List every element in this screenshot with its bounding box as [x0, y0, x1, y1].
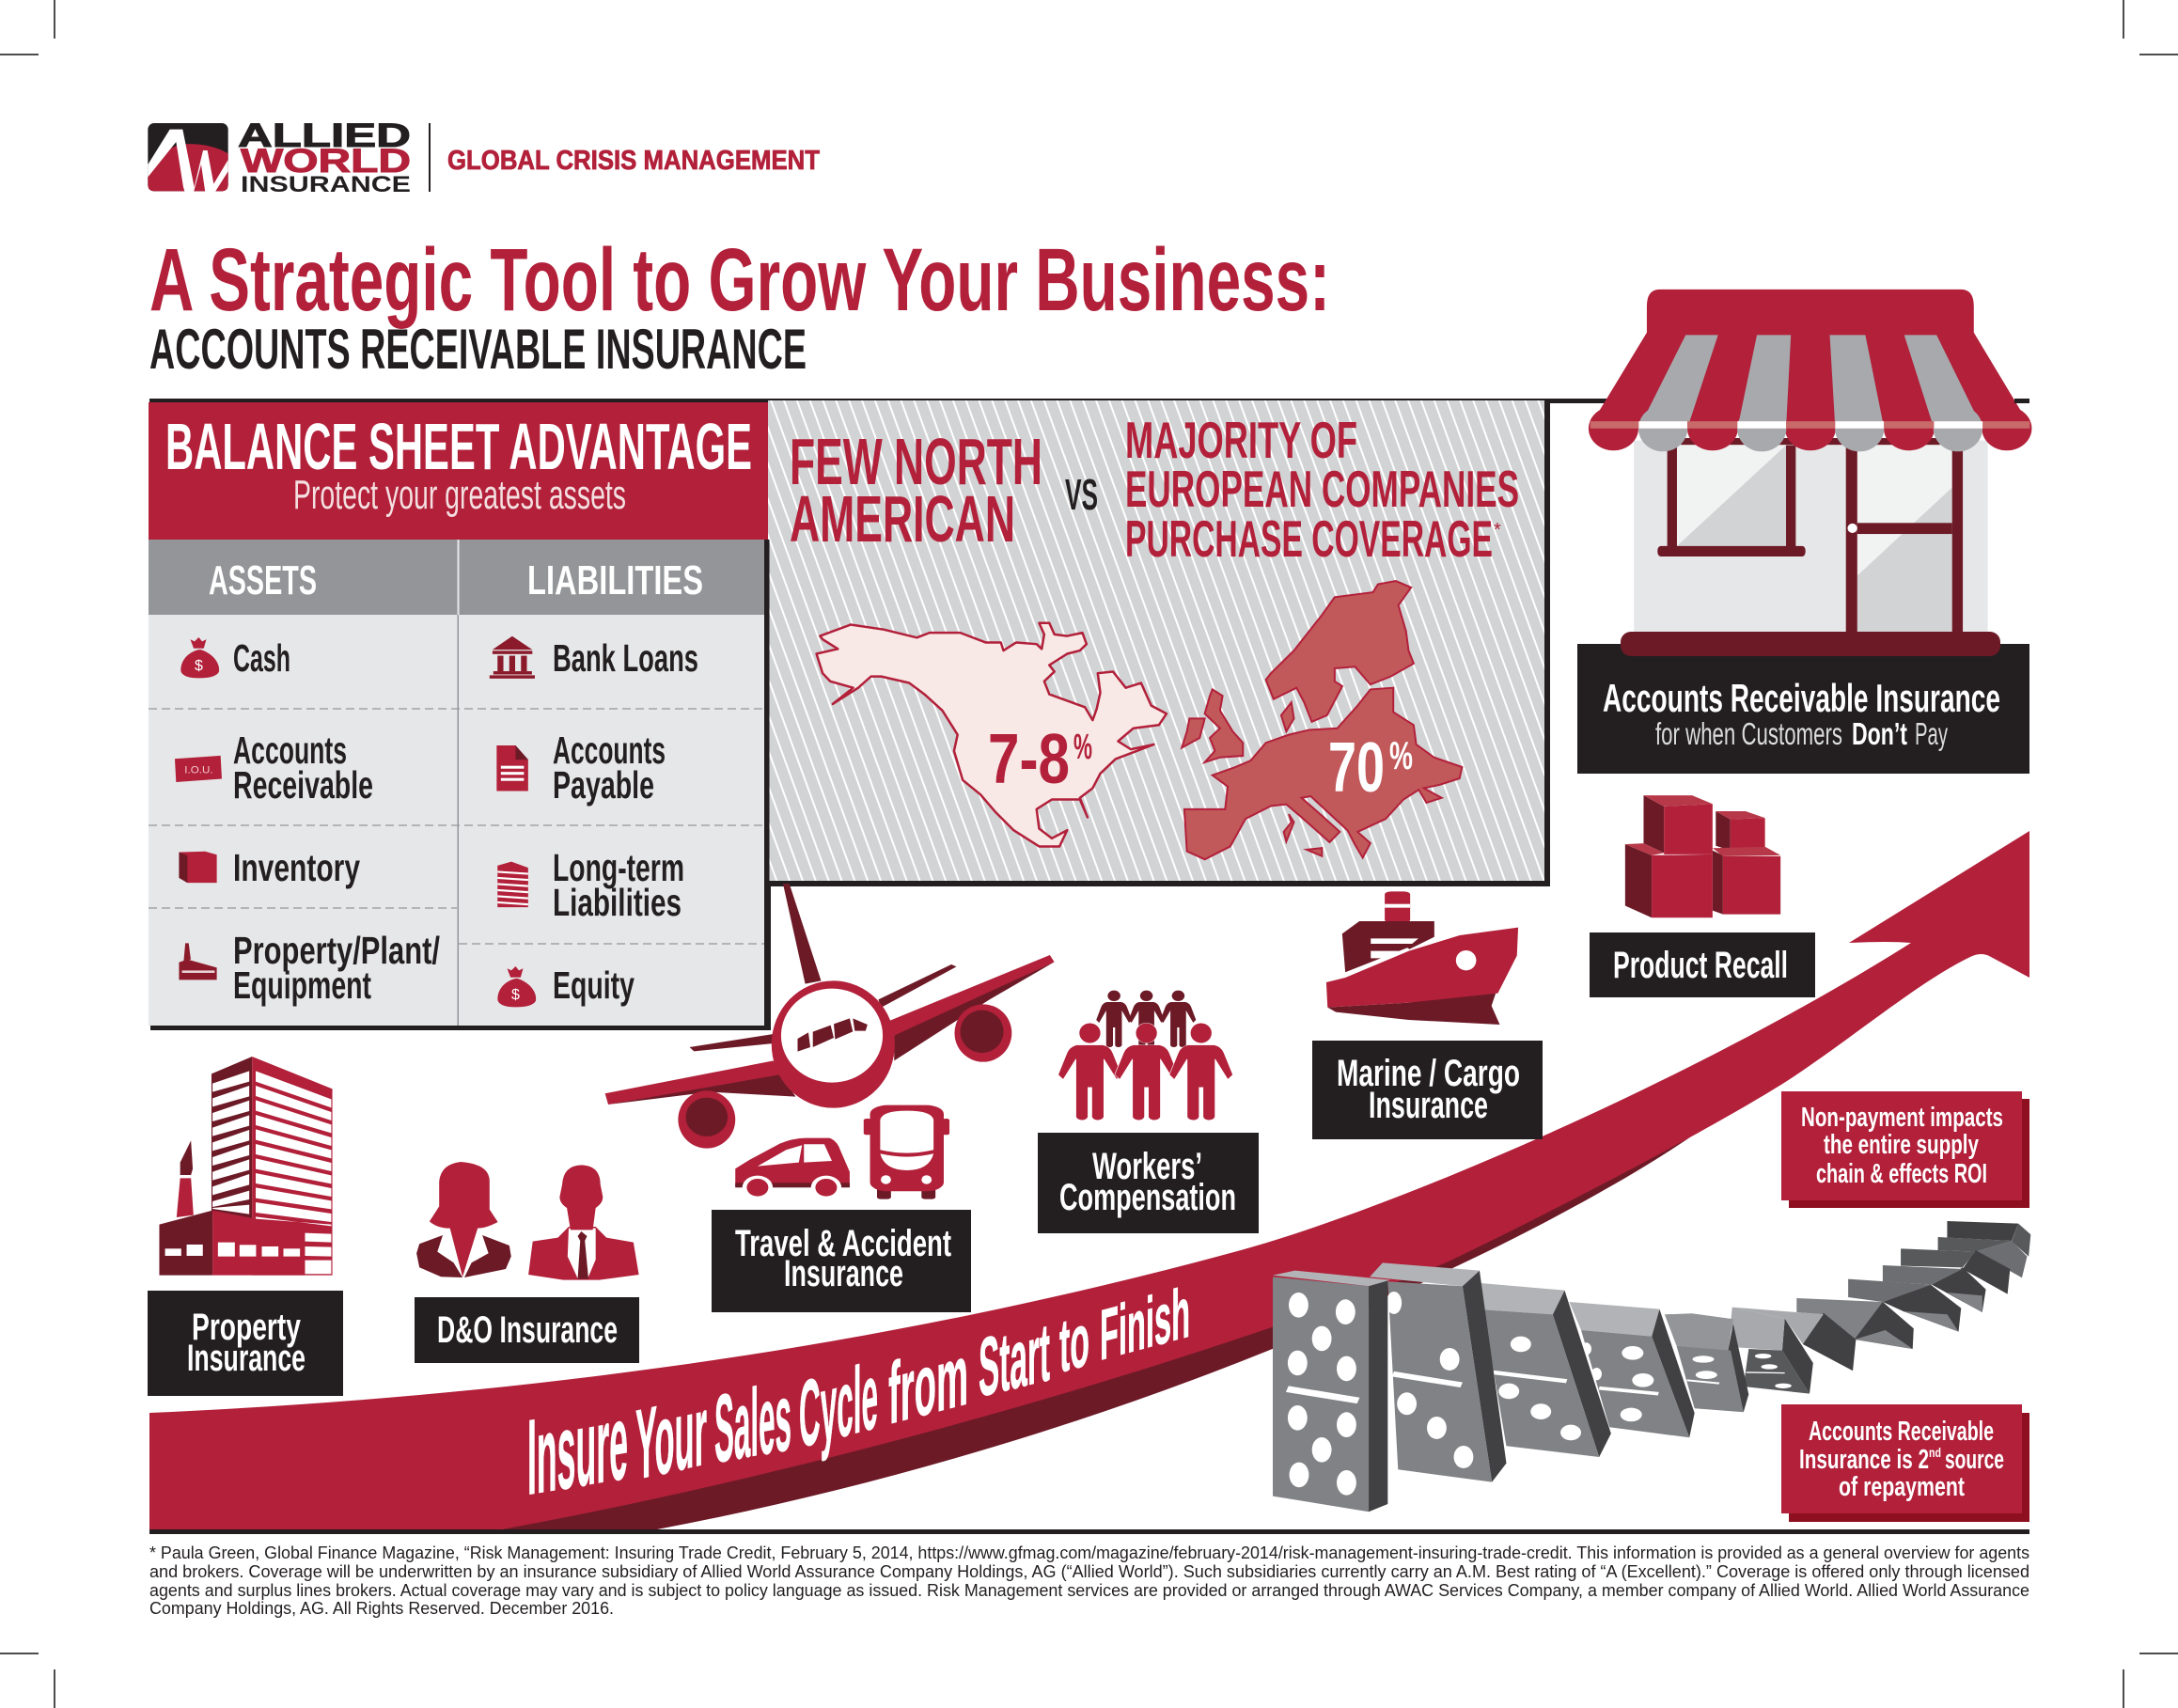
label: workers compensation: Workers’: [1092, 1146, 1202, 1187]
footnote: * Paula Green, Global Finance Magazine, “Risk Management: Insuring Trade Credit, February 5, 2014, https://www.gfmag.com/magazine/february-2014/risk-management-insuring-trade-credit. This information is provided as a general overview for agents: [149, 1543, 2029, 1562]
heading: few North American: [790, 425, 1042, 556]
callout: second source of repayment: of repayment: [1839, 1472, 1965, 1502]
row: cash: [180, 636, 290, 680]
row: equity: Equity: [553, 964, 635, 1007]
assets column: [175, 636, 440, 1007]
heading: majority of European companies: MAJORITY OF: [1125, 411, 1357, 469]
row: accounts receivable: [175, 729, 373, 807]
table header: LIABILITIES: [527, 557, 703, 603]
label: workers compensation: Compensation: [1059, 1177, 1236, 1218]
logo: Allied World Insurance: INSURANCE: [241, 172, 411, 197]
row: accounts payable: [496, 729, 666, 807]
front row of workers: [1058, 1023, 1233, 1120]
icon: property buildings: [159, 1057, 333, 1276]
label: marine and cargo insurance: Marine / Cargo: [1337, 1053, 1520, 1094]
icon: airplane: [605, 884, 1055, 1149]
table header: ASSETS: [209, 557, 317, 603]
label: property insurance: [148, 1291, 343, 1396]
heading: majority of European companies: [1125, 411, 1519, 568]
ribbon text: insure your sales cycle from start to finish: Start: [979, 1305, 1050, 1415]
row: equity: $: [511, 987, 520, 1003]
row: property plant equipment: Equipment: [233, 964, 371, 1007]
map: Europe: [1182, 581, 1462, 859]
map: Europe: 70: [1328, 728, 1385, 807]
text: Global Crisis Management: GLOBAL CRISIS MANAGEMENT: [447, 146, 820, 176]
callout: non-payment impacts: [1781, 1091, 2029, 1208]
icon: directors and officers: [416, 1162, 639, 1280]
row: property plant equipment: Property/Plant/: [233, 929, 440, 972]
liabilities column: [490, 636, 698, 1007]
callout: second source of repayment: Insurance is 2: [1799, 1445, 1929, 1475]
icon: cargo ship: [1326, 891, 1518, 1025]
label: property insurance: Property: [192, 1307, 302, 1348]
label: travel and accident insurance: Insurance: [784, 1253, 903, 1294]
logo: Allied World Insurance: WORLD: [241, 143, 411, 180]
label: accounts receivable insurance: Don’t: [1852, 716, 1907, 751]
logo: Allied World Insurance: [148, 118, 411, 197]
panel: balance sheet advantage: [149, 402, 771, 1030]
ribbon text: insure your sales cycle from start to finish: Your: [635, 1373, 707, 1501]
ribbon text: insure your sales cycle from start to finish: [527, 1272, 1190, 1518]
map: North America: %: [1073, 728, 1092, 767]
icon: car: [735, 1138, 850, 1199]
back row of workers: [1096, 991, 1196, 1047]
icon: falling dominoes: [1273, 1221, 2030, 1512]
ribbon text: insure your sales cycle from start to finish: from: [888, 1324, 968, 1443]
label: accounts receivable insurance: [1577, 632, 2029, 774]
row: inventory: Inventory: [233, 846, 360, 889]
footnote: [149, 1543, 2029, 1618]
row: accounts receivable: Receivable: [233, 763, 373, 807]
label: travel and accident insurance: Travel & Accident: [735, 1223, 951, 1264]
label: D&O insurance: [415, 1297, 639, 1363]
row: cash: Cash: [233, 636, 290, 680]
footnote: agents and surplus lines brokers. Actual coverage may vary and is subject to policy language as issued. Risk Management services are provided or arranged through AWAC Services Company, a member company of Allied World. Allied World Assurance: [149, 1581, 2029, 1600]
row: accounts receivable: Accounts: [233, 729, 347, 772]
map: North America: [817, 623, 1167, 846]
callout: second source of repayment: Accounts Receivable: [1809, 1417, 1994, 1447]
heading: majority of European companies: EUROPEAN COMPANIES: [1125, 460, 1519, 518]
map: North America: 7-8: [988, 719, 1070, 798]
ribbon text: insure your sales cycle from start to finish: Insure: [527, 1382, 628, 1518]
callout: second source of repayment: nd: [1929, 1445, 1941, 1460]
label: travel and accident insurance: [712, 1210, 971, 1312]
label: accounts receivable insurance: for when Customers: [1655, 716, 1842, 751]
arrow: sales cycle ribbon: [149, 831, 2029, 1529]
label: accounts receivable insurance: Pay: [1915, 716, 1948, 751]
row: accounts payable: Payable: [553, 763, 654, 807]
heading: few North American: FEW NORTH: [790, 425, 1042, 498]
row: accounts payable: Accounts: [553, 729, 666, 772]
row: long-term liabilities: Liabilities: [553, 881, 682, 924]
panel header: [149, 402, 768, 540]
row: cash: $: [195, 658, 203, 674]
callout: second source of repayment: source: [1945, 1445, 2004, 1475]
panel: North America vs Europe: [766, 399, 1550, 886]
row: inventory: [179, 846, 360, 889]
row: bank loans: Bank Loans: [553, 636, 698, 680]
heading: few North American: AMERICAN: [790, 482, 1015, 556]
subtitle: ACCOUNTS RECEIVABLE INSURANCE: [149, 318, 807, 381]
icon: workers group: [1058, 991, 1233, 1120]
ribbon text: insure your sales cycle from start to finish: Sales: [714, 1362, 791, 1483]
row: equity: [497, 964, 635, 1007]
row: bank loans: [490, 636, 698, 680]
heading: majority of European companies: *: [1494, 520, 1501, 541]
text: vs: VS: [1065, 470, 1098, 519]
heading: majority of European companies: PURCHASE COVERAGE: [1125, 509, 1493, 568]
icon: bus: [864, 1105, 949, 1199]
panel header: Protect your greatest assets: [293, 472, 626, 518]
label: product recall: Product Recall: [1613, 945, 1788, 986]
title: A Strategic Tool to Grow Your Business:: [149, 230, 1330, 330]
row: long-term liabilities: [497, 846, 684, 924]
arrow: sales cycle ribbon: Finish: [1100, 1272, 1190, 1376]
row: property plant equipment: [179, 929, 440, 1007]
label: marine and cargo insurance: [1312, 1041, 1543, 1139]
icon: AW logo mark: [148, 123, 228, 192]
icon: storefront: [1589, 290, 2031, 634]
row: accounts receivable: I.O.U.: [184, 765, 213, 776]
callout: second source of repayment: [1781, 1404, 2029, 1522]
ribbon text: insure your sales cycle from start to finish: to: [1059, 1297, 1089, 1389]
footnote: and brokers. Coverage will be underwritten by an insurance subsidiary of Allied World Assurance Company Holdings, AG (“Allied World”). Such subsidiaries currently carry an A.M. Best rating of “A (Excellent).” Coverage is offered only through licensed: [149, 1562, 2029, 1581]
callout: non-payment impacts: chain & effects ROI: [1816, 1159, 1987, 1189]
ribbon text: insure your sales cycle from start to finish: Cycle: [799, 1342, 878, 1468]
label: D&O insurance: D&O Insurance: [437, 1309, 618, 1351]
label: product recall: [1590, 932, 1815, 997]
label: marine and cargo insurance: Insurance: [1369, 1085, 1488, 1126]
callout: non-payment impacts: Non-payment impacts: [1801, 1103, 2003, 1133]
logo: Allied World Insurance: ALLIED: [238, 118, 411, 154]
row: long-term liabilities: Long-term: [553, 846, 684, 889]
icon: product boxes: [1625, 795, 1780, 917]
label: property insurance: Insurance: [187, 1338, 306, 1379]
map: Europe: %: [1389, 733, 1413, 777]
footnote: Company Holdings, AG. All Rights Reserved. December 2016.: [149, 1599, 614, 1618]
label: workers compensation: [1038, 1133, 1259, 1233]
table header: [149, 540, 764, 615]
callout: non-payment impacts: the entire supply: [1824, 1130, 1979, 1160]
panel header: BALANCE SHEET ADVANTAGE: [165, 410, 752, 483]
